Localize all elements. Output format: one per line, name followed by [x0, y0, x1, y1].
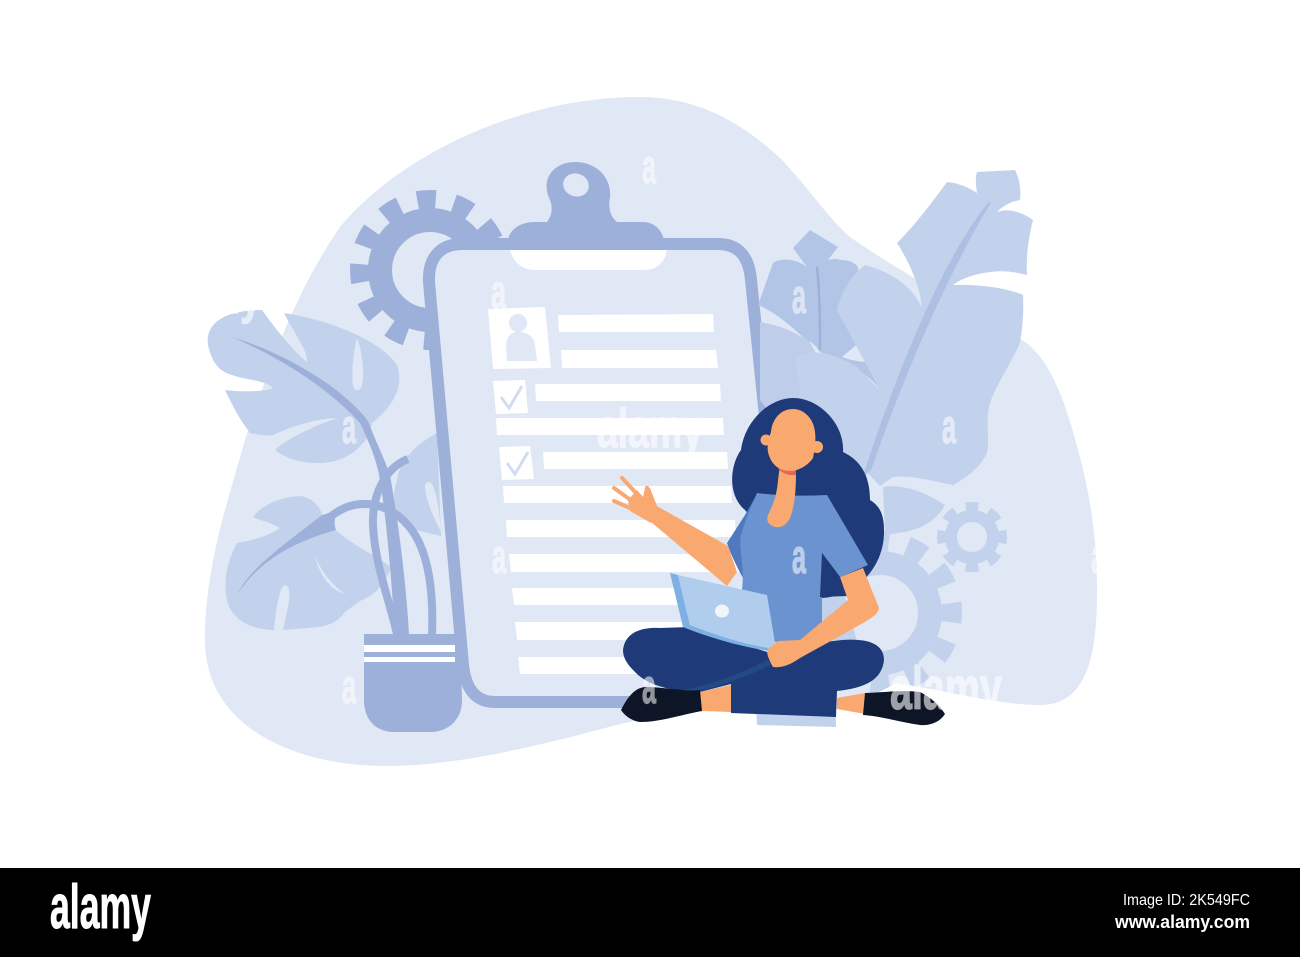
watermark letters: a	[642, 661, 656, 714]
right ankle	[837, 693, 865, 714]
neck	[767, 465, 796, 527]
mid leaf	[790, 353, 890, 480]
plant: back leaf	[394, 433, 441, 536]
watermark words	[155, 268, 1002, 722]
plant: left	[208, 310, 462, 732]
watermark letters: a	[942, 401, 956, 454]
watermark letters: a	[342, 661, 356, 714]
raised hand	[614, 478, 657, 523]
clip hole	[560, 170, 592, 200]
upper monstera leaf	[208, 310, 399, 463]
watermark letters: a	[792, 271, 806, 324]
footer logo: alamy	[50, 873, 151, 942]
plant: right leaves	[758, 170, 1033, 535]
laptop	[670, 573, 776, 652]
clipboard clip	[508, 162, 664, 250]
watermark letters: a	[492, 531, 506, 584]
pot	[364, 634, 462, 732]
lower left leaf part	[760, 322, 830, 420]
lower monstera leaf	[226, 496, 391, 630]
big banana leaf	[837, 170, 1033, 486]
watermark letters: a	[1091, 531, 1105, 584]
form lines	[496, 314, 741, 674]
watermark letters: a	[342, 401, 356, 454]
lower small leaf	[883, 486, 945, 535]
lower leaf slit	[315, 555, 345, 594]
watermark words: alamy	[155, 268, 261, 324]
clipboard	[429, 162, 790, 702]
gear: small right	[942, 507, 1002, 567]
necklace	[778, 468, 796, 475]
upper leaf vein and stem	[232, 337, 409, 634]
small light notch	[842, 342, 875, 362]
image id: Image ID: 2K549FC	[1123, 892, 1250, 909]
legs	[623, 627, 884, 717]
lower leaf vein	[237, 510, 340, 595]
website: www.alamy.com	[1114, 912, 1250, 932]
gear: large right	[808, 541, 952, 685]
shirt	[740, 493, 868, 642]
lower stem arc	[330, 504, 432, 634]
gear: behind clipboard	[360, 200, 500, 340]
hair under arm	[820, 553, 848, 597]
pot stripes	[364, 645, 455, 662]
leg crease	[683, 660, 772, 692]
watermark words: alamy	[890, 655, 1002, 722]
shirt shade	[727, 494, 760, 578]
clip shadow	[510, 250, 667, 270]
arc stem	[373, 459, 408, 634]
footer bar	[0, 868, 1300, 957]
raised arm	[651, 505, 737, 586]
ears	[760, 434, 823, 453]
big leaf vein	[865, 202, 990, 473]
watermark letters: a	[491, 266, 506, 319]
watermark letters: a	[642, 141, 656, 194]
paper behind woman	[755, 690, 836, 727]
checkbox 1	[493, 380, 528, 414]
right sock	[863, 691, 945, 725]
watermark letters: a	[792, 531, 806, 584]
background blob	[205, 97, 1097, 766]
small rear leaf	[758, 230, 880, 390]
leaf slit	[352, 338, 363, 390]
woman	[614, 398, 945, 725]
hair	[732, 398, 884, 598]
watermark letters	[342, 141, 1105, 714]
face	[768, 409, 815, 471]
left ankle	[700, 685, 731, 712]
lower arm and hand	[767, 568, 879, 667]
white floor over gear	[840, 683, 1040, 740]
clipboard board	[429, 244, 790, 702]
watermark words: alamy	[597, 397, 703, 459]
paper piece below knee	[822, 597, 858, 645]
checkbox 2	[499, 446, 534, 480]
profile photo box	[488, 307, 551, 369]
left sock	[621, 687, 702, 722]
